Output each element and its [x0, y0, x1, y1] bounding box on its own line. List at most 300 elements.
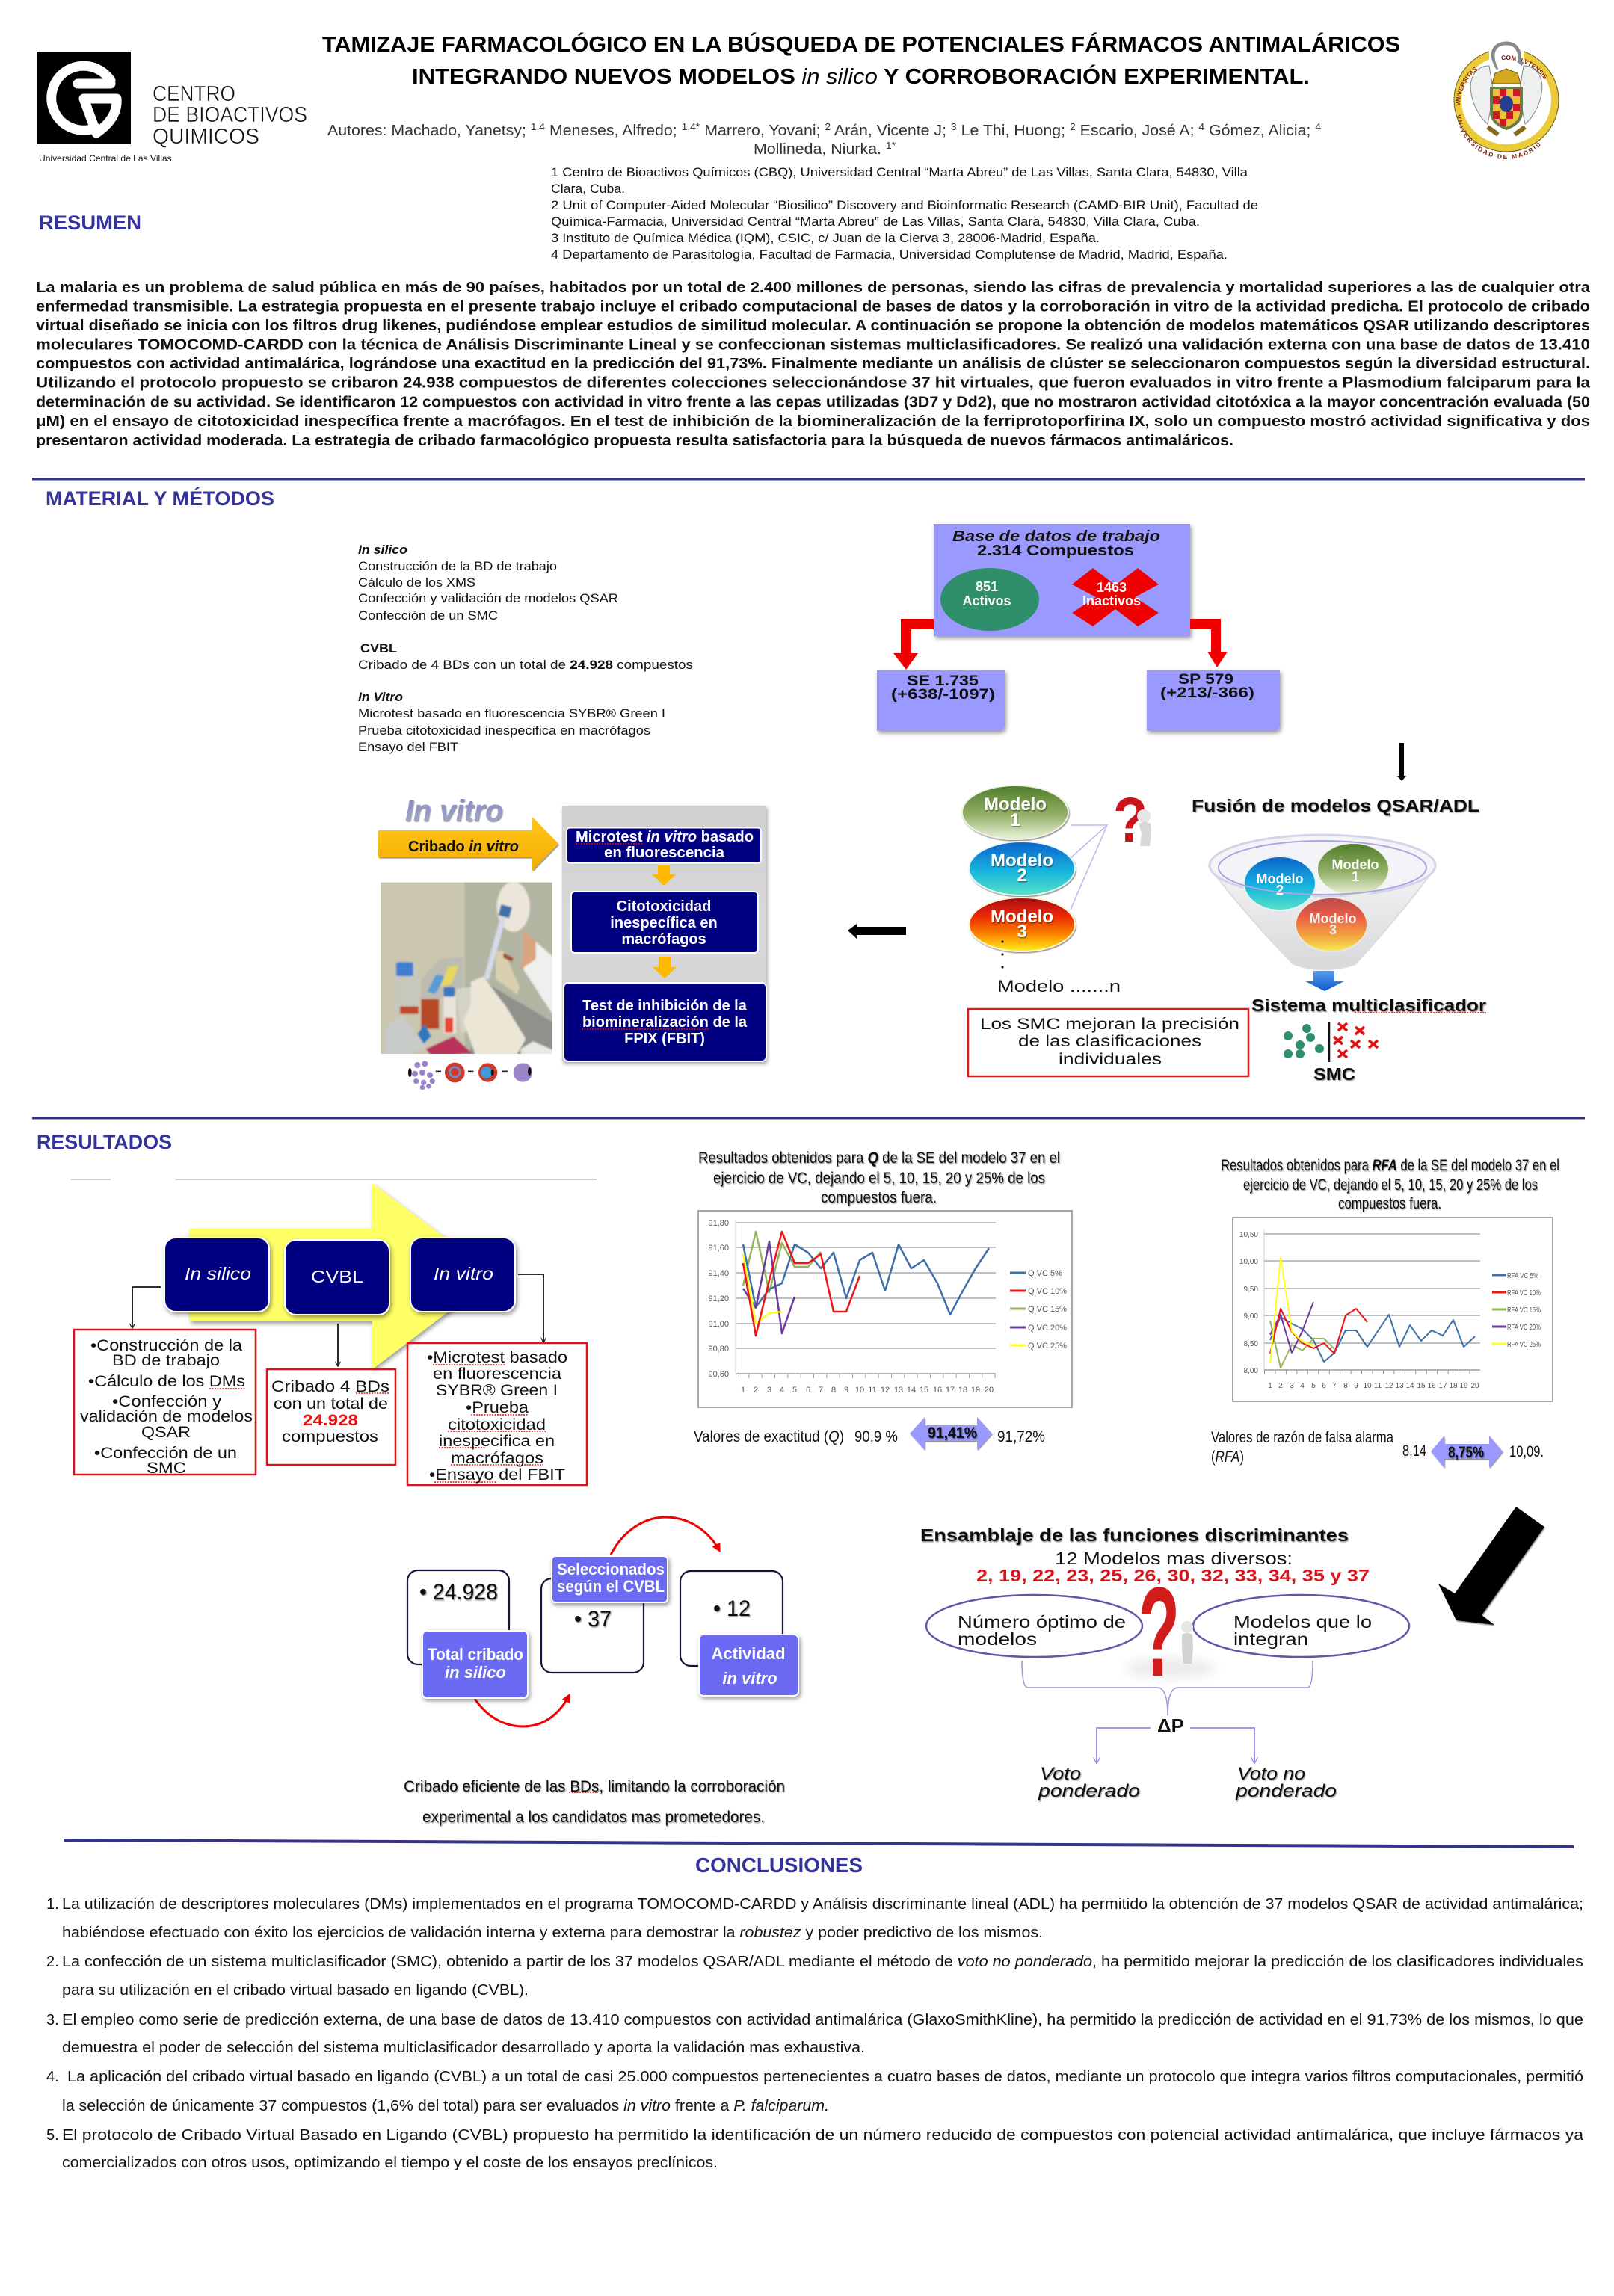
- affiliations: 2 Unit of Computer-Aided Molecular “Biosilico” Discovery and Bioinformatic Research (CAMD-BIR Unit), Facultad de: [551, 198, 1258, 212]
- chart title: Q: Resultados obtenidos para Q de la SE del modelo 37 en el: [698, 1149, 1060, 1167]
- callout: SMC improves precision: individuales: [1059, 1051, 1162, 1068]
- heading: fusión: Fusión de modelos QSAR/ADL: [1192, 796, 1479, 815]
- line chart: Q: [698, 1211, 1072, 1407]
- abstract text: compuestos con actividad antimalárica, lográndose una exactitud en la predicción del 91,73%. Finalmente mediante un análisis de clúster se seleccionaron compuestos según la diversidad estructural.: [36, 355, 1590, 372]
- authors: Le Thi, Huong;: [957, 123, 1070, 139]
- title: INTEGRANDO NUEVOS MODELOS in silico Y CORROBORACIÓN EXPERIMENTAL.: [412, 64, 1310, 89]
- arrows: delta P split: [1097, 1728, 1254, 1763]
- oval: número óptimo de modelos: [926, 1595, 1142, 1657]
- conclusion 3: El empleo como serie de predicción externa, de una base de datos de 13.410 compuestos con actividad antimalárica (GlaxoSmithKline), ha permitido la predicción de actividad en el 91,73% de los mismos, lo que: [62, 2012, 1583, 2028]
- diagram: base de datos de trabajo: 2.314 Compuestos: [977, 543, 1134, 559]
- line chart: Q: 16: [933, 1386, 942, 1395]
- sphere: modelo 3 in funnel: Modelo: [1310, 911, 1356, 926]
- affiliations: 1 Centro de Bioactivos Químicos (CBQ), Universidad Central “Marta Abreu” de Las Villas, Santa Clara, 54830, Villa: [551, 165, 1248, 179]
- stat: razón de falsa alarma: 10,09.: [1509, 1443, 1544, 1460]
- abstract text: presentaron actividad moderada. La estrategia de cribado farmacológico propuesta resulta satisfactoria para la búsqueda de nuevos fármacos antimaláricos.: [36, 432, 1233, 449]
- label: 12 modelos: 12 Modelos mas diversos:: [1055, 1549, 1293, 1568]
- line chart: Q: 10: [855, 1386, 864, 1395]
- box: SE: (+638/-1097): [891, 687, 995, 703]
- label: seleccionados: según el CVBL: [557, 1577, 665, 1596]
- activos circle: Activos: [962, 593, 1011, 608]
- sphere: modelo 3: [969, 898, 1075, 951]
- assay: FBIT: FPIX (FBIT): [624, 1031, 705, 1047]
- panel: cvbl cribado: con un total de: [274, 1395, 388, 1413]
- card: 37: [541, 1578, 644, 1673]
- line chart: Q: 9: [844, 1386, 848, 1395]
- box: SE: [877, 670, 1005, 731]
- label: voto ponderado: [1038, 1764, 1140, 1801]
- line chart: RFA: 7: [1332, 1382, 1337, 1390]
- chart title: RFA: compuestos fuera.: [1338, 1195, 1441, 1212]
- sphere: modelo 2 in funnel: [1244, 857, 1316, 910]
- line chart: RFA: RFA VC 20%: [1507, 1324, 1541, 1332]
- panel: in silico steps: SMC: [147, 1460, 186, 1477]
- conclusion 4: La aplicación del cribado virtual basado en ligando (CVBL) a un total de casi 25.000 compuestos pertenecientes a cuatro bases de datos, mediante un protocolo que integra varios filtros computacionales, permitió: [67, 2069, 1583, 2085]
- conclusion 3: demuestra el poder de selección del sistema multiclasificador desarrollado y aporta la validación mas exhaustiva.: [62, 2040, 865, 2056]
- icon: SMC classifier: SMC: [1313, 1064, 1355, 1084]
- arrow: down: [1397, 743, 1406, 781]
- stat: valores de exactitud: 91,72%: [997, 1428, 1045, 1445]
- authors: 2: [1070, 121, 1076, 132]
- abstract text: determinación de su actividad. Se identificaron 12 compuestos con actividad in vitro frente a las cepas utilizadas (3D7 y Dd2), que no mostraron actividad citotóxica a la mayor concentración evaluada (50: [36, 393, 1590, 411]
- card: 37: • 37: [574, 1607, 612, 1632]
- label: sistema multiclasificador: Sistema multiclasificador: [1251, 996, 1486, 1015]
- authors: Marrero, Yovani;: [700, 123, 825, 139]
- panel: in silico steps: BD de trabajo: [112, 1352, 220, 1369]
- conclusion 2: 2.: [46, 1954, 59, 1970]
- icon: question figure: ?: [1113, 785, 1148, 855]
- line chart: Q: 5: [792, 1386, 797, 1395]
- label: seleccionados: [552, 1556, 668, 1602]
- logo: Centro de Bioactivos Quimicos: DE BIOACTIVOS: [153, 103, 307, 127]
- label: voto no ponderado: Voto no: [1237, 1764, 1305, 1784]
- panel: in silico steps: QSAR: [141, 1424, 191, 1441]
- box: CVBL: CVBL: [311, 1267, 363, 1286]
- icon: parasite stages: [408, 1061, 532, 1090]
- oval: número óptimo de modelos: modelos: [958, 1629, 1037, 1649]
- stat: valores de exactitud: Valores de exactitud (Q): [694, 1428, 844, 1445]
- logo: Centro de Bioactivos Quimicos: Universidad Central de Las Villas.: [39, 153, 174, 164]
- affiliations: 4 Departamento de Parasitología, Facultad de Farmacia, Universidad Complutense de Madrid, Madrid, España.: [551, 247, 1228, 262]
- abstract text: enfermedad transmisible. La estrategia propuesta en el presente trabajo incluye el cribado computacional de bases de datos y la corroboración in vitro de la actividad predicha. El protocolo de cribado: [36, 297, 1590, 315]
- logo: Centro de Bioactivos Quimicos: QUIMICOS: [153, 125, 259, 149]
- panel: in vitro steps: •Microtest basado: [427, 1349, 567, 1366]
- box: CVBL: [285, 1240, 389, 1315]
- conclusion 5: El protocolo de Cribado Virtual Basado en Ligando (CVBL) propuesto ha permitido la identificación de un número reducido de compuestos con potencial actividad antimalárica, que incluye fármacos ya: [62, 2127, 1584, 2144]
- methods summary text: Prueba citotoxicidad inespecifica en macrófagos: [358, 723, 650, 738]
- label: 12 modelos: [976, 1549, 1370, 1585]
- conclusion 4: [46, 2069, 1583, 2114]
- arrow: to SP: [1190, 619, 1228, 667]
- photo: lab pipetting: [379, 880, 555, 1056]
- methods summary text: Microtest basado en fluorescencia SYBR® Green I: [358, 706, 665, 720]
- line chart: Q: 15: [920, 1386, 928, 1395]
- sphere: modelo 2: [969, 842, 1075, 895]
- logo: Centro de Bioactivos Quimicos: [37, 52, 307, 164]
- heading: material y métodos: MATERIAL Y MÉTODOS: [46, 487, 274, 510]
- authors: Mollineda, Niurka.: [754, 141, 873, 158]
- conclusion 5: 5.: [46, 2127, 59, 2144]
- logo: Centro de Bioactivos Quimicos: CENTRO: [153, 82, 235, 106]
- affiliations: [551, 165, 1258, 262]
- label: modelo n: [997, 940, 1121, 996]
- sphere: modelo 1: 1: [1010, 810, 1020, 830]
- assay: FBIT: Test de inhibición de la: [582, 998, 748, 1014]
- panel: in vitro assays: [562, 806, 766, 1061]
- label: voto no ponderado: [1235, 1764, 1337, 1801]
- line chart: Q: 20: [985, 1386, 994, 1395]
- sphere: modelo 2 in funnel: Modelo: [1256, 871, 1304, 886]
- diagram: base de datos de trabajo: [934, 524, 1190, 636]
- methods summary text: [358, 543, 693, 754]
- activos circle: 851: [976, 579, 998, 594]
- conclusion 5: [46, 2127, 1584, 2171]
- panel: in silico steps: •Confección de un: [94, 1445, 237, 1462]
- conclusion 1: [46, 1896, 1583, 1941]
- label: voto ponderado: ponderado: [1038, 1781, 1140, 1801]
- panel: in vitro steps: •Prueba: [466, 1399, 529, 1416]
- sphere: modelo 1 in funnel: 1: [1352, 869, 1359, 884]
- line chart: RFA: 10,00: [1239, 1258, 1258, 1266]
- line chart: RFA: 18: [1449, 1382, 1458, 1390]
- arrow: curved red bottom: [475, 1696, 569, 1726]
- title: [322, 31, 1400, 89]
- methods summary text: CVBL: [360, 641, 397, 655]
- line chart: Q: 12: [881, 1386, 890, 1395]
- panel: in vitro steps: SYBR® Green I: [436, 1382, 558, 1399]
- line chart: Q: 91,20: [708, 1294, 729, 1303]
- line chart: RFA: RFA VC 25%: [1507, 1341, 1541, 1349]
- line chart: Q: 7: [819, 1386, 823, 1395]
- box: in silico: [164, 1238, 269, 1312]
- authors: Escario, José A;: [1076, 123, 1198, 139]
- box: SP: SP 579: [1178, 672, 1233, 688]
- label: actividad in vitro: in vitro: [722, 1669, 777, 1688]
- logo: Universidad Complutense shield: VNIVERSIDAD DE MADRID: [1456, 114, 1540, 159]
- sphere: modelo 2: Modelo: [991, 851, 1053, 871]
- diagram: base de datos de trabajo: Base de datos de trabajo: [952, 528, 1160, 545]
- assay: microtest: en fluorescencia: [604, 845, 725, 861]
- line chart: Q: 91,60: [708, 1244, 729, 1253]
- line chart: RFA: 2: [1278, 1382, 1283, 1390]
- line chart: Q: Q VC 10%: [1028, 1287, 1067, 1296]
- line chart: Q: 91,80: [708, 1219, 729, 1228]
- label: total cribado: [422, 1631, 528, 1698]
- callout: SMC improves precision: Los SMC mejoran la precisión: [980, 1016, 1239, 1033]
- sphere: modelo 1: Modelo: [984, 794, 1047, 815]
- line chart: RFA: 8,50: [1244, 1340, 1258, 1348]
- line chart: Q: 11: [868, 1386, 877, 1395]
- arrow: cribado in vitro: [378, 817, 558, 871]
- methods summary text: Construcción de la BD de trabajo: [358, 559, 557, 573]
- caption: cribado eficiente: Cribado eficiente de las BDs, limitando la corroboración: [404, 1778, 785, 1795]
- line chart: Q: 13: [894, 1386, 903, 1395]
- label: actividad in vitro: Actividad: [711, 1644, 786, 1663]
- heading: conclusiones: CONCLUSIONES: [695, 1854, 863, 1877]
- heading: resumen: RESUMEN: [39, 212, 141, 234]
- sphere: modelo 3: 3: [1017, 922, 1027, 942]
- label: modelo n: Modelo .......n: [997, 977, 1121, 996]
- chart title: RFA: ejercicio de VC, dejando el 5, 10, 15, 20 y 25% de los: [1243, 1176, 1538, 1194]
- line chart: Q: 17: [946, 1386, 955, 1395]
- line chart: Q: 91,00: [708, 1320, 729, 1329]
- methods summary text: Confección y validación de modelos QSAR: [358, 591, 618, 605]
- line chart: RFA: 8,00: [1244, 1367, 1258, 1375]
- line chart: Q: Q VC 5%: [1028, 1269, 1062, 1278]
- panel: in silico steps: •Cálculo de los DMs: [88, 1373, 245, 1390]
- box: SE: SE 1.735: [907, 673, 979, 689]
- label: voto no ponderado: ponderado: [1235, 1781, 1337, 1801]
- panel: cvbl cribado: compuestos: [282, 1428, 378, 1445]
- conclusion 1: La utilización de descriptores moleculares (DMs) implementados en el programa TOMOCOMD-CARDD y Análisis discriminante lineal (ADL) ha permitido la obtención de 37 modelos QSAR de actividad antimalárica;: [62, 1896, 1583, 1913]
- line chart: Q: 4: [780, 1386, 784, 1395]
- panel: in vitro steps: inespecifica en: [439, 1433, 555, 1450]
- line chart: RFA: [1233, 1218, 1553, 1401]
- line chart: RFA: 10,50: [1239, 1231, 1258, 1239]
- affiliations: Clara, Cuba.: [551, 182, 625, 196]
- authors: [327, 121, 1321, 158]
- methods summary text: In Vitro: [358, 690, 403, 704]
- line chart: RFA: 9: [1354, 1382, 1358, 1390]
- panel: cvbl cribado: 24.928: [303, 1412, 358, 1429]
- line chart: RFA: 16: [1427, 1382, 1436, 1390]
- line chart: Q: 90,60: [708, 1370, 729, 1379]
- box: SP: (+213/-366): [1160, 685, 1254, 701]
- line chart: RFA: 3: [1290, 1382, 1294, 1390]
- abstract text: virtual diseñado se inicia con los filtros drug likenes, pudiéndose emplear estudios de similitud molecular. A continuación se propone la obtención de modelos matemáticos QSAR utilizando descriptores: [36, 317, 1590, 334]
- line chart: Q: Q VC 25%: [1028, 1342, 1067, 1351]
- chart title: Q: [698, 1149, 1060, 1206]
- stat: valores de exactitud: 91,41%: [928, 1425, 977, 1442]
- methods summary text: Cribado de 4 BDs con un total de 24.928 compuestos: [358, 658, 693, 672]
- stat: valores de exactitud: 90,9 %: [854, 1428, 898, 1445]
- label: total cribado: Total cribado: [428, 1645, 523, 1664]
- authors: 4: [1198, 121, 1204, 132]
- line chart: RFA: 17: [1438, 1382, 1447, 1390]
- line chart: RFA: 8: [1343, 1382, 1348, 1390]
- panel: in vitro steps: citotoxicidad: [448, 1416, 546, 1434]
- line chart: Q: Q VC 15%: [1028, 1305, 1067, 1314]
- line chart: Q: Q VC 20%: [1028, 1324, 1067, 1333]
- sphere: modelo 3 in funnel: 3: [1329, 922, 1337, 937]
- line chart: RFA: 11: [1374, 1382, 1382, 1390]
- line chart: Q: 18: [958, 1386, 967, 1395]
- panel: in silico steps: •Construcción de la: [90, 1337, 242, 1354]
- label: actividad in vitro: [699, 1635, 798, 1696]
- line chart: Q: 6: [806, 1386, 810, 1395]
- sphere: modelo 1 in funnel: Modelo: [1332, 857, 1379, 872]
- chart title: Q: compuestos fuera.: [821, 1189, 937, 1206]
- icon: SMC classifier: [1284, 1022, 1378, 1084]
- heading: resultados: RESULTADOS: [37, 1131, 172, 1153]
- line chart: Q: 3: [767, 1386, 771, 1395]
- line chart: Q: 14: [907, 1386, 916, 1395]
- label: 12 modelos: 2, 19, 22, 23, 25, 26, 30, 32, 33, 34, 35 y 37: [976, 1566, 1370, 1585]
- sphere: modelo 3 in funnel: [1296, 898, 1367, 951]
- assay: FBIT: [564, 983, 766, 1061]
- oval: modelos que lo integran: Modelos que lo: [1233, 1612, 1372, 1632]
- conclusions list: [46, 1896, 1584, 2171]
- oval: número óptimo de modelos: Número óptimo de: [958, 1612, 1126, 1632]
- stat: razón de falsa alarma: [1211, 1429, 1544, 1468]
- authors: 3: [951, 121, 957, 132]
- assay: citotoxicidad: inespecífica en: [610, 915, 718, 931]
- line chart: Q: 8: [831, 1386, 836, 1395]
- arrow: workflow yellow: [190, 1183, 496, 1369]
- chart title: Q: ejercicio de VC, dejando el 5, 10, 15, 20 y 25% de los: [713, 1170, 1045, 1187]
- label: voto ponderado: Voto: [1040, 1764, 1081, 1784]
- abstract text: moleculares TOMOCOMD-CARDD con la técnica de Análisis Discriminante Lineal y se confeccionan sistemas multiclasificadores. Se realizó una validación externa con una base de datos de 13.410: [36, 336, 1590, 353]
- line chart: RFA: 13: [1395, 1382, 1404, 1390]
- arrow: [653, 957, 677, 978]
- stat: razón de falsa alarma: Valores de razón de falsa alarma: [1211, 1429, 1393, 1446]
- line chart: RFA: 12: [1384, 1382, 1393, 1390]
- conclusion 2: [46, 1954, 1583, 1999]
- methods summary text: Ensayo del FBIT: [358, 740, 458, 754]
- card: 24.928: • 24.928: [419, 1580, 498, 1605]
- box: SP: [1147, 670, 1280, 731]
- panel: in vitro steps: en fluorescencia: [433, 1365, 561, 1383]
- card: 12: • 12: [713, 1596, 751, 1621]
- panel: in silico steps: •Confección y: [112, 1393, 222, 1410]
- panel: cvbl cribado: [267, 1369, 395, 1465]
- card: 12: [680, 1571, 783, 1666]
- connector: in vitro list: [518, 1274, 543, 1342]
- funnel of models: [1209, 835, 1435, 970]
- line chart: RFA: 5: [1311, 1382, 1316, 1390]
- label: total cribado: in silico: [445, 1663, 506, 1682]
- assay: microtest: Microtest in vitro basado: [576, 829, 754, 845]
- methods summary text: In silico: [358, 543, 407, 557]
- conclusion 1: habiéndose efectuado con éxito los ejercicios de validación interna y externa para demostrar la robustez y poder predictivo de los mismos.: [62, 1925, 1043, 1941]
- abstract text: μM) en el ensayo de citotoxicidad inespecífica frente a macrófagos. En el test de inhibición de la biomineralización de la ferriprotoporfirina IX, solo un compuesto mostró actividad significativa y dos: [36, 413, 1590, 430]
- sphere: modelo 1: [962, 786, 1068, 839]
- sphere: modelo 3: Modelo: [991, 907, 1053, 927]
- line chart: RFA: 9,50: [1244, 1286, 1258, 1294]
- conclusion 1: 1.: [46, 1896, 59, 1913]
- oval: modelos que lo integran: integran: [1233, 1629, 1308, 1649]
- authors: Arán, Vicente J;: [831, 123, 951, 139]
- authors: Gómez, Alicia;: [1204, 123, 1315, 139]
- sphere: modelo 1 in funnel: [1317, 843, 1389, 895]
- arrow: [652, 865, 676, 886]
- authors: Meneses, Alfredo;: [545, 123, 682, 139]
- line chart: RFA: 20: [1470, 1382, 1479, 1390]
- line chart: RFA: 4: [1300, 1382, 1305, 1390]
- inactivos crossed out: [1072, 568, 1159, 626]
- bracket to delta P: [1022, 1661, 1313, 1715]
- assay: FBIT: biomineralización de la: [582, 1014, 748, 1031]
- callout: SMC improves precision: [968, 1009, 1248, 1076]
- panel: in silico steps: [74, 1330, 256, 1477]
- line chart: RFA: RFA VC 5%: [1507, 1272, 1538, 1280]
- line chart: Q: 91,40: [708, 1269, 729, 1278]
- label: seleccionados: Seleccionados: [557, 1560, 665, 1578]
- connector lines between models: [1071, 825, 1107, 910]
- assay: citotoxicidad: [571, 892, 758, 953]
- box: in vitro: [410, 1238, 515, 1312]
- affiliations: Química-Farmacia, Universidad Central “Marta Abreu” de Las Villas, Santa Clara, 54830, Villa Clara, Cuba.: [551, 215, 1200, 229]
- chart title: RFA: [1221, 1157, 1559, 1212]
- logo: Universidad Complutense shield: [1453, 42, 1559, 159]
- arrow: to SE: [893, 619, 934, 670]
- line chart: RFA: 9,00: [1244, 1312, 1258, 1321]
- stat: razón de falsa alarma: (RFA): [1211, 1448, 1244, 1466]
- activos circle: [940, 568, 1039, 631]
- authors: 2: [825, 121, 831, 132]
- sphere: modelo 2 in funnel: 2: [1276, 883, 1284, 898]
- label: delta P: ΔP: [1157, 1715, 1184, 1737]
- connector: cvbl box: [337, 1324, 339, 1366]
- panel: in vitro steps: •Ensayo del FBIT: [429, 1466, 565, 1484]
- panel: in vitro steps: macrófagos: [451, 1450, 543, 1467]
- stat: valores de exactitud: [694, 1417, 1045, 1450]
- methods summary text: Cálculo de los XMS: [358, 575, 475, 590]
- panel: cvbl cribado: Cribado 4 BDs: [271, 1378, 389, 1395]
- box: in silico: In silico: [185, 1264, 251, 1283]
- line chart: Q: 19: [971, 1386, 980, 1395]
- assay: citotoxicidad: Citotoxicidad: [617, 898, 711, 915]
- box: in vitro: In vitro: [434, 1264, 493, 1283]
- sphere: modelo 2: 2: [1017, 865, 1027, 886]
- stat: razón de falsa alarma: 8,75%: [1448, 1444, 1484, 1461]
- arrow: left: [848, 924, 906, 939]
- in vitro heading: In vitro: [405, 794, 503, 827]
- conclusion 3: 3.: [46, 2012, 59, 2028]
- panel: in silico steps: validación de modelos: [80, 1408, 253, 1425]
- line chart: RFA: 1: [1268, 1382, 1272, 1390]
- assay: citotoxicidad: macrófagos: [621, 931, 706, 948]
- conclusion 4: 4.: [46, 2069, 59, 2085]
- arrow: cribado in vitro: Cribado in vitro: [408, 839, 519, 855]
- line chart: RFA: 14: [1405, 1382, 1414, 1390]
- heading: ensamblaje: Ensamblaje de las funciones discriminantes: [920, 1525, 1349, 1545]
- conclusion 2: La confección de un sistema multiclasificador (SMC), obtenido a partir de los 37 modelos QSAR/ADL mediante el método de voto no ponderado , ha permitido mejorar la predicción de los clasificadores individuales: [62, 1954, 1583, 1970]
- line chart: Q: 1: [741, 1386, 745, 1395]
- panel: in vitro steps: [407, 1343, 587, 1485]
- icon: large question figure: ?: [1139, 1561, 1180, 1703]
- affiliations: 3 Instituto de Química Médica (IQM), CSIC, c/ Juan de la Cierva 3, 28006-Madrid, España.: [551, 231, 1100, 245]
- authors: 1,4*: [682, 121, 700, 132]
- caption: cribado eficiente: [404, 1778, 785, 1826]
- conclusion 4: la selección de únicamente 37 compuestos (1,6% del total) para ser evaluados in vitro frente a P. falciparum.: [62, 2098, 829, 2114]
- conclusion 5: comercializados con otros usos, optimizando el tiempo y el coste de los ensayos preclínicos.: [62, 2155, 718, 2171]
- abstract text: La malaria es un problema de salud pública en más de 90 países, habitados por un total de 2.400 millones de personas, siendo las cifras de prevalencia y mortalidad superiores a las de cualquier otra: [36, 279, 1591, 296]
- conclusion 3: [46, 2012, 1583, 2056]
- line chart: Q: 2: [754, 1386, 758, 1395]
- arrow: curved red top: [611, 1517, 719, 1555]
- conclusion 2: para su utilización en el cribado virtual basado en ligando (CVBL).: [62, 1982, 529, 1999]
- logo: Universidad Complutense shield: VNIVERSITAS COMPLVTENSIS: [1456, 55, 1547, 106]
- caption: cribado eficiente: experimental a los candidatos mas prometedores.: [422, 1809, 765, 1826]
- line chart: RFA: 19: [1459, 1382, 1468, 1390]
- callout: SMC improves precision: de las clasificaciones: [1018, 1033, 1201, 1050]
- line chart: RFA: RFA VC 15%: [1507, 1306, 1541, 1315]
- oval: modelos que lo integran: [1193, 1595, 1409, 1657]
- connector: in silico list: [132, 1287, 161, 1328]
- inactivos crossed out: 1463: [1097, 580, 1127, 595]
- line chart: Q: 90,80: [708, 1345, 729, 1354]
- line chart: RFA: 6: [1322, 1382, 1326, 1390]
- methods summary text: Confección de un SMC: [358, 608, 498, 623]
- inactivos crossed out: Inactivos: [1082, 593, 1141, 608]
- abstract text: Utilizando el protocolo propuesto se cribaron 24.938 compuestos de diferentes colecciones seleccionándose 37 hit virtuales, que fueron evaluados in vitro frente a Plasmodium falciparum para la: [36, 374, 1591, 392]
- assay: microtest: [567, 828, 761, 862]
- arrow: large black diagonal: [1438, 1507, 1544, 1625]
- authors: Autores: Machado, Yanetsy;: [327, 123, 514, 139]
- stat: razón de falsa alarma: 8,14: [1402, 1442, 1426, 1460]
- line chart: RFA: RFA VC 10%: [1507, 1289, 1541, 1297]
